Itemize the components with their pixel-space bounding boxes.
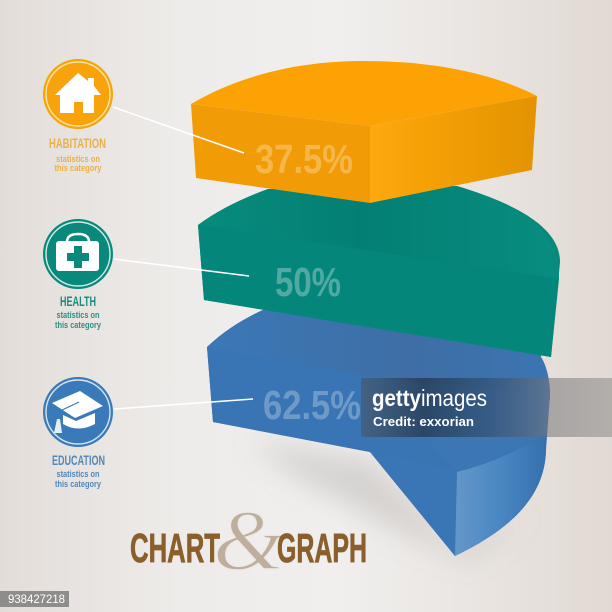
value: 50%: 50% — [275, 259, 341, 305]
panel: habitation — [43, 59, 113, 173]
title: chart and graph — [130, 492, 367, 588]
pie slice: health 50% — [198, 186, 560, 357]
image id label: 938427218 — [8, 594, 65, 606]
text: health caption — [55, 310, 101, 330]
word: graph: GRAPH — [277, 525, 367, 571]
watermark banner — [361, 378, 612, 437]
text: health caption: statistics on — [56, 310, 100, 320]
text: education caption: this category — [55, 479, 101, 489]
heading: habitation: HABITATION — [49, 135, 106, 151]
value: 62.5%: 62.5% — [263, 382, 361, 428]
heading: health: HEALTH — [60, 293, 96, 309]
connector line: habitation — [113, 107, 244, 153]
pie slice: habitation 37.5% — [191, 61, 537, 203]
text: health caption: this category — [55, 320, 101, 330]
ampersand: & — [213, 492, 285, 588]
icon: graduation cap — [43, 377, 113, 447]
text: education caption: statistics on — [56, 469, 100, 479]
text: habitation caption: this category — [54, 163, 102, 173]
pie slice: education 62.5% — [207, 310, 550, 556]
icon: first aid kit — [43, 219, 113, 289]
watermark credit: Credit: exxorian — [373, 414, 474, 429]
text: education caption — [55, 469, 101, 489]
value: 37.5%: 37.5% — [255, 136, 353, 182]
word: chart: CHART — [130, 525, 220, 571]
heading: education: EDUCATION — [52, 452, 105, 468]
connector line: education — [114, 399, 253, 409]
drop shadow under chart — [250, 440, 525, 560]
connector line: health — [114, 259, 249, 276]
image id label — [0, 591, 69, 607]
text: habitation caption — [54, 154, 102, 173]
icon: house — [43, 59, 113, 129]
panel: health — [43, 219, 113, 330]
watermark logo text: gettyimages — [372, 385, 487, 411]
panel: education — [43, 377, 113, 489]
text: habitation caption: statistics on — [56, 154, 100, 164]
